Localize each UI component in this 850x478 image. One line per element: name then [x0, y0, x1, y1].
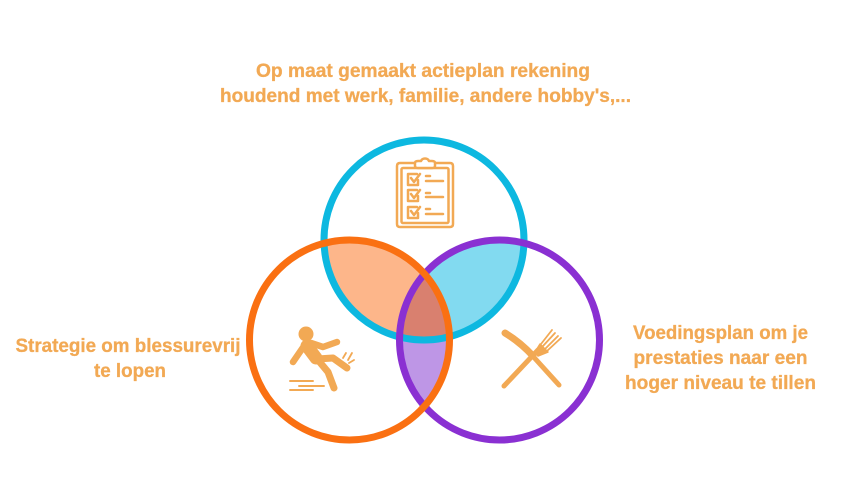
overlap: blue and orange [328, 244, 420, 332]
circle: purple [400, 240, 600, 440]
heading: action plan: Op maat gemaakt actieplan rekening [256, 61, 590, 82]
icon: crossed fork and knife [504, 330, 561, 386]
label: nutrition plan: Voedingsplan om je [633, 323, 808, 344]
heading: action plan: houdend met werk, familie, andere hobby's,... [220, 86, 631, 107]
icon: person slipping [290, 326, 354, 390]
overlap: blue and purple [429, 244, 520, 332]
label: nutrition plan [625, 323, 816, 394]
label: injury prevention strategy: Strategie om blessurevrij [16, 336, 240, 357]
overlap: orange and purple [403, 341, 446, 400]
icon: clipboard checklist [397, 158, 453, 227]
label: injury prevention strategy: te lopen [94, 361, 166, 382]
venn diagram [250, 140, 600, 440]
label: nutrition plan: hoger niveau te tillen [625, 373, 816, 394]
circle: orange [250, 240, 450, 440]
heading: action plan [220, 61, 631, 107]
label: injury prevention strategy [16, 336, 240, 382]
label: nutrition plan: prestaties naar een [634, 348, 808, 369]
overlap: all three [403, 279, 446, 336]
circle: blue [324, 140, 524, 340]
